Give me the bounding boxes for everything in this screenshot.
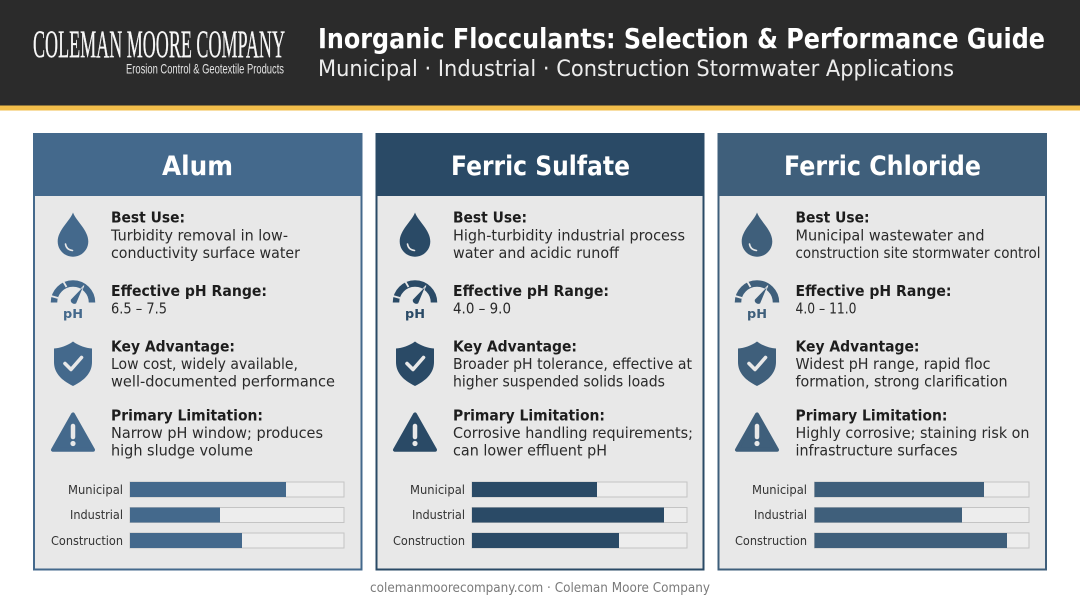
logo tagline: Erosion Control & Geotextile Products [126,60,284,76]
text: best use: conductivity surface water [111,244,301,262]
text: key advantage [111,338,335,390]
text: primary limitation: Primary Limitation: [796,406,948,424]
text: key advantage: higher suspended solids loads [453,372,665,390]
subtitle: Municipal · Industrial · Construction Stormwater Applications [318,57,954,82]
text: key advantage: Broader pH tolerance, effective at [453,355,692,373]
text: key advantage [453,338,692,390]
text: effective pH range: Effective pH Range: [111,282,267,300]
bar chart: Alum suitability: Industrial [70,508,123,523]
heading: Ferric Sulfate: Ferric Sulfate [451,151,630,182]
bar chart: Ferric Sulfate suitability: Construction [393,534,465,549]
text: best use: Best Use: [453,208,527,226]
text: best use: High-turbidity industrial process [453,226,685,244]
panel: Ferric Sulfate [376,133,704,570]
icon: pH gauge: pH [747,306,767,321]
icon: shield check [54,342,92,386]
footer: colemanmoorecompany.com · Coleman Moore Company [370,581,710,596]
text: primary limitation [111,406,323,460]
icon: pH gauge [735,281,776,321]
heading: Ferric Chloride: Ferric Chloride [784,151,981,182]
text: primary limitation: can lower effluent pH [453,442,607,460]
text: key advantage: Key Advantage: [111,338,235,356]
icon: shield check [396,342,434,386]
text: primary limitation [453,406,693,460]
bar chart: Alum suitability [51,482,344,549]
text: primary limitation: Primary Limitation: [453,406,605,424]
bar chart: Alum suitability: Construction [51,534,123,549]
icon: water drop [400,212,430,257]
header band [0,0,1080,110]
icon: water drop [742,212,772,257]
header band: COLEMAN MOORE COMPANY [33,23,285,66]
icon: pH gauge [51,281,92,321]
text: primary limitation: Corrosive handling requirements; [453,424,693,442]
text: key advantage: Key Advantage: [453,338,577,356]
text: best use [110,208,301,262]
text: primary limitation: Highly corrosive; staining risk on [796,424,1030,442]
text: effective pH range: 4.0 – 11.0 [796,300,856,318]
text: primary limitation: high sludge volume [111,442,253,460]
text: best use: Turbidity removal in low- [110,226,288,244]
text: best use: construction site stormwater control [796,244,1040,262]
bar chart: Ferric Sulfate suitability: Municipal [410,483,465,498]
text: key advantage: Widest pH range, rapid floc [796,355,990,373]
text: effective pH range [796,282,952,318]
text: key advantage [796,338,1008,390]
bar chart: Ferric Chloride suitability: Municipal [752,483,807,498]
text: key advantage: well-documented performance [111,372,335,390]
bar chart: Ferric Sulfate suitability: Industrial [412,508,465,523]
text: best use [453,208,685,262]
text: effective pH range [111,282,267,318]
text: best use [796,208,1040,262]
text: key advantage: formation, strong clarification [796,372,1008,390]
icon: water drop [58,212,88,257]
text: primary limitation [796,406,1030,460]
icon: pH gauge: pH [63,306,83,321]
icon: shield check [738,342,776,386]
bar chart: Ferric Chloride suitability: Construction [735,534,807,549]
text: primary limitation: Primary Limitation: [111,406,263,424]
bar chart: Ferric Chloride suitability: Industrial [754,508,807,523]
text: best use: Municipal wastewater and [796,226,984,244]
text: effective pH range: Effective pH Range: [796,282,952,300]
bar chart: Alum suitability: Municipal [68,483,123,498]
bar chart: Ferric Chloride suitability [735,482,1029,549]
heading: Alum: Alum [162,151,233,182]
icon: pH gauge [393,281,434,321]
panel: Alum [33,133,362,570]
text: effective pH range [453,282,609,318]
text: effective pH range: 4.0 – 9.0 [453,300,511,318]
icon: warning triangle [53,414,93,450]
bar chart: Ferric Sulfate suitability [393,482,687,549]
text: best use: Best Use: [796,208,870,226]
panel: Ferric Chloride [718,133,1047,570]
text: key advantage: Key Advantage: [796,338,920,356]
text: key advantage: Low cost, widely available, [111,355,298,373]
text: primary limitation: Narrow pH window; produces [111,424,323,442]
text: effective pH range: 6.5 – 7.5 [111,300,167,318]
text: primary limitation: infrastructure surfaces [796,442,958,460]
icon: pH gauge: pH [405,306,425,321]
text: best use: Best Use: [111,208,185,226]
text: effective pH range: Effective pH Range: [453,282,609,300]
icon: warning triangle [395,414,435,450]
text: best use: water and acidic runoff [453,244,619,262]
icon: warning triangle [737,414,777,450]
